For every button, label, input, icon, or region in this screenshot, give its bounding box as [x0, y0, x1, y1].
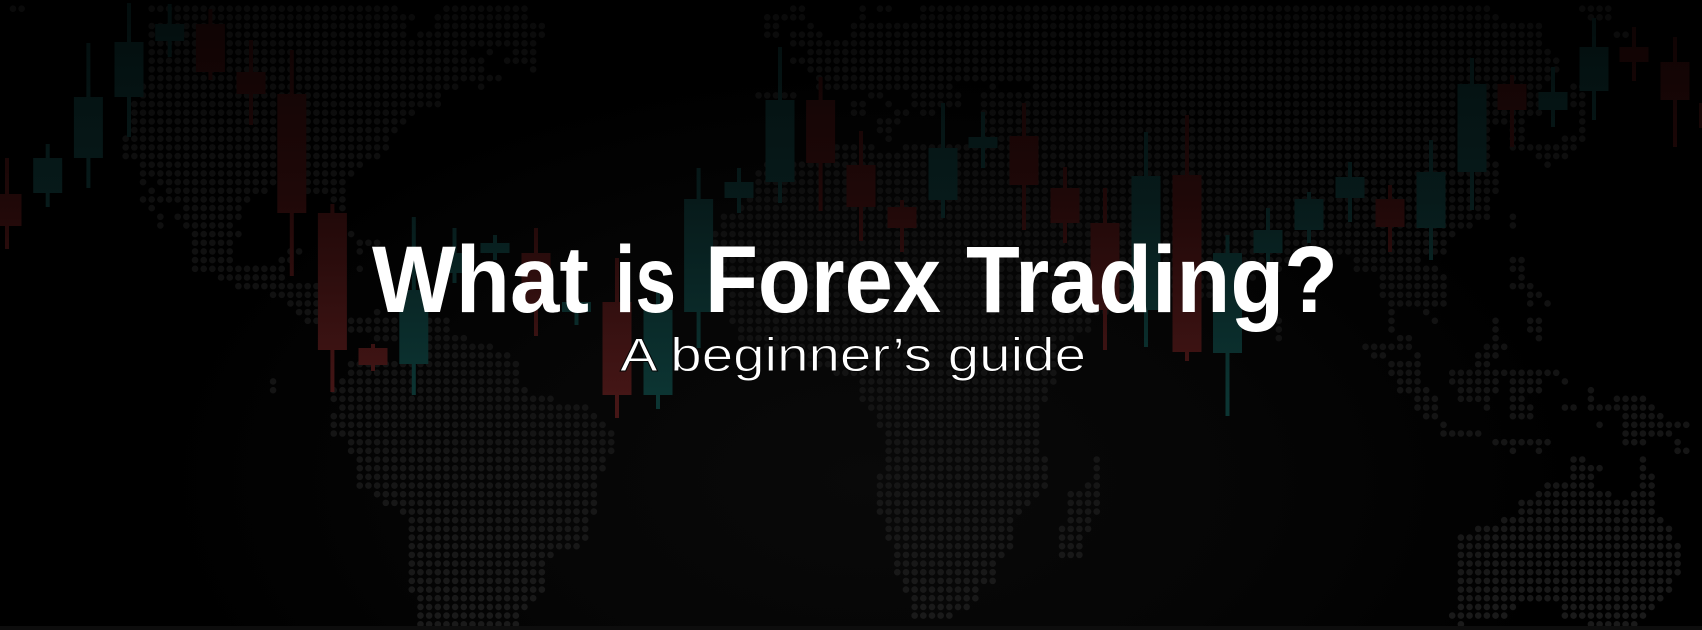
title: Trading? [966, 227, 1338, 333]
title: is [615, 227, 676, 333]
title [372, 227, 1338, 333]
bullish candles [33, 3, 1609, 416]
bottom edge strip [0, 626, 1702, 630]
title: Forex [705, 227, 941, 333]
subtitle: A beginner’s guide [620, 328, 1086, 381]
title: What [372, 227, 589, 333]
bearish candles [0, 9, 1702, 418]
candlestick chart [0, 3, 1702, 418]
